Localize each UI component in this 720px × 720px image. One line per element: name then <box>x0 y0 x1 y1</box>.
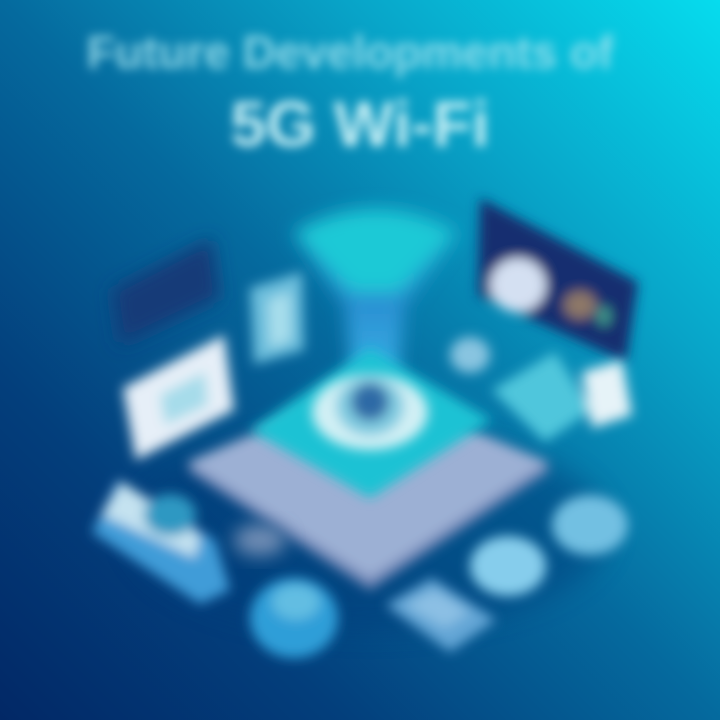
device: lower left laptop <box>92 480 230 604</box>
node: bottom tablet <box>386 578 496 652</box>
node: far right ellipse <box>552 495 628 555</box>
wifi signal cone <box>293 208 458 375</box>
right side cards <box>450 337 632 442</box>
title <box>87 26 614 160</box>
teal isometric tile <box>250 348 492 498</box>
eye-shaped ring hub <box>312 374 428 450</box>
soft shadow under the scene <box>130 430 610 630</box>
grey block beside the platform <box>234 524 286 556</box>
grey isometric base platform <box>188 385 548 590</box>
white screen: left <box>123 335 234 460</box>
illustration: isometric network scene <box>92 198 638 658</box>
node: bottom circle <box>250 578 338 658</box>
title: Future Developments of <box>87 26 614 78</box>
dark panel: top left <box>112 238 220 345</box>
node: lower right ellipse <box>470 536 546 596</box>
small card: upper left <box>250 272 304 364</box>
dark panel: top right <box>478 198 638 362</box>
title: 5G Wi-Fi <box>231 88 489 160</box>
